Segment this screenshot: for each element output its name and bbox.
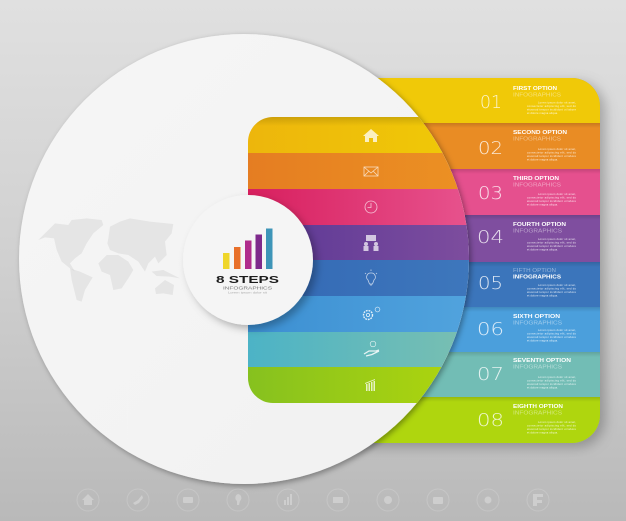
option 8 text: 08: [477, 410, 504, 431]
icon: home: [363, 129, 379, 142]
icon: light bulb: [365, 270, 377, 285]
icon: org chart: [364, 235, 378, 251]
bar chart logo: [223, 228, 272, 269]
option 8 text: Lorem ipsum dolor sit amet,: [538, 420, 576, 424]
option 5 text: consectetur adipiscing elit, sed do: [527, 286, 576, 290]
option 2 text: Lorem ipsum dolor sit amet,: [538, 147, 576, 151]
option 5 text: FIFTH OPTION: [513, 268, 556, 274]
option 6 text: INFOGRAPHICS: [513, 320, 563, 326]
option 3 text: [478, 176, 576, 206]
option 1 text: INFOGRAPHICS: [513, 92, 562, 98]
big white disc: [19, 34, 469, 484]
option 1 text: [480, 86, 576, 115]
option 5 text: INFOGRAPHICS: [513, 274, 562, 280]
option 8 text: [477, 404, 576, 434]
option 4 text: 04: [477, 227, 504, 248]
option 7 text: SEVENTH OPTION: [513, 358, 571, 364]
option 5 text: eiusmod tempor incididunt ut labore: [527, 290, 576, 294]
option 3 text: INFOGRAPHICS: [513, 182, 562, 188]
icon: hand with coin: [364, 341, 379, 356]
option 3 text: THIRD OPTION: [513, 176, 559, 182]
option 7 text: et dolore magna aliqua.: [527, 386, 558, 390]
option 4 text: [477, 222, 576, 252]
option 5 text: 05: [478, 273, 503, 294]
option 5 text: et dolore magna aliqua.: [527, 294, 558, 298]
center badge: Lorem ipsum dolor sit: [228, 292, 267, 294]
option 1 text: eiusmod tempor incididunt ut labore: [527, 108, 576, 112]
option 8 text: eiusmod tempor incididunt ut labore: [527, 427, 576, 431]
option 1 text: consectetur adipiscing elit, sed do: [527, 104, 576, 108]
option 2 text: 02: [478, 138, 503, 159]
option 6 text: consectetur adipiscing elit, sed do: [527, 332, 576, 336]
option 6 text: SIXTH OPTION: [513, 314, 561, 320]
option 1 text: 01: [480, 92, 502, 113]
option 8 text: consectetur adipiscing elit, sed do: [527, 424, 576, 428]
panel: outer option stack: [362, 76, 611, 452]
icon: clock: [365, 201, 377, 213]
option 6 text: Lorem ipsum dolor sit amet,: [538, 328, 576, 332]
option 6 text: eiusmod tempor incididunt ut labore: [527, 335, 576, 339]
center badge: 8 STEPS: [216, 275, 279, 286]
option 2 text: eiusmod tempor incididunt ut labore: [527, 154, 576, 158]
option 2 text: SECOND OPTION: [513, 130, 567, 136]
option 7 text: consectetur adipiscing elit, sed do: [527, 378, 576, 382]
option 5 text: [478, 268, 576, 298]
option 3 text: 03: [478, 183, 503, 204]
option 4 text: consectetur adipiscing elit, sed do: [527, 240, 576, 244]
option 4 text: et dolore magna aliqua.: [527, 248, 558, 252]
icon: gears: [364, 307, 380, 320]
option 2 text: INFOGRAPHICS: [513, 136, 562, 142]
option 6 text: 06: [477, 319, 504, 340]
icon: mail: [364, 167, 378, 176]
center badge: [183, 195, 313, 325]
option 7 text: INFOGRAPHICS: [513, 364, 563, 370]
option 6 text: et dolore magna aliqua.: [527, 338, 558, 342]
option 3 text: Lorem ipsum dolor sit amet,: [538, 192, 576, 196]
panel: inner icon stack: [248, 117, 469, 403]
option 7 text: Lorem ipsum dolor sit amet,: [538, 375, 576, 379]
option 3 text: et dolore magna aliqua.: [527, 202, 558, 206]
option 1 text: FIRST OPTION: [513, 86, 557, 92]
option 8 text: EIGHTH OPTION: [513, 404, 563, 410]
option 2 text: et dolore magna aliqua.: [527, 158, 558, 162]
option 1 text: Lorem ipsum dolor sit amet,: [538, 100, 576, 104]
option 1 text: et dolore magna aliqua.: [527, 111, 558, 115]
option 7 text: eiusmod tempor incididunt ut labore: [527, 382, 576, 386]
center badge: INFOGRAPHICS: [223, 286, 272, 290]
option 8 text: et dolore magna aliqua.: [527, 430, 558, 434]
option 4 text: eiusmod tempor incididunt ut labore: [527, 244, 576, 248]
option 7 text: [477, 358, 576, 390]
option 7 text: 07: [477, 364, 504, 385]
icon: growth chart: [365, 379, 375, 391]
option 3 text: eiusmod tempor incididunt ut labore: [527, 199, 576, 203]
option 2 text: consectetur adipiscing elit, sed do: [527, 150, 576, 154]
option 2 text: [478, 130, 576, 162]
option 8 text: INFOGRAPHICS: [513, 410, 563, 416]
world map: [38, 218, 180, 302]
option 4 text: INFOGRAPHICS: [513, 228, 563, 234]
option 5 text: Lorem ipsum dolor sit amet,: [538, 283, 576, 287]
option 4 text: FOURTH OPTION: [513, 222, 566, 228]
option 3 text: consectetur adipiscing elit, sed do: [527, 196, 576, 200]
option 4 text: Lorem ipsum dolor sit amet,: [538, 237, 576, 241]
bottom icon row: [77, 489, 549, 511]
option 6 text: [477, 314, 576, 342]
